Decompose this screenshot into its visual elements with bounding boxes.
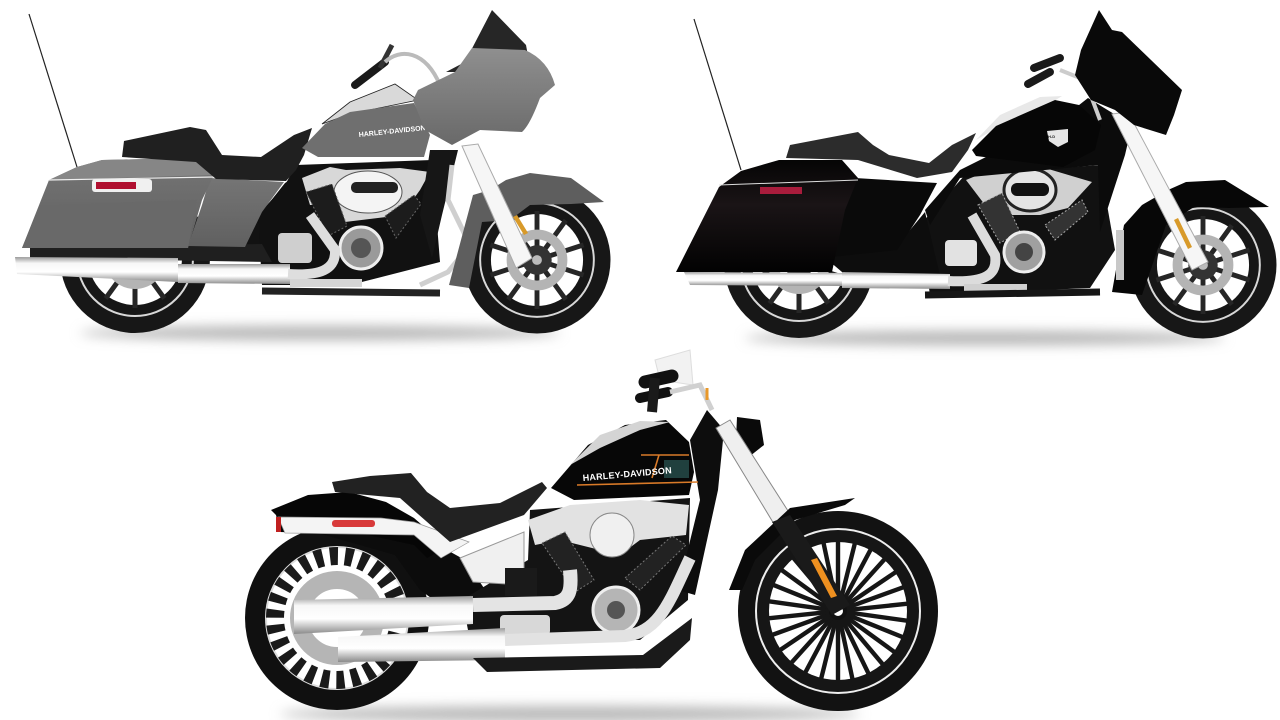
fork [1112, 112, 1208, 270]
rear wheel [724, 188, 874, 338]
lower fork [772, 515, 850, 615]
engine block [460, 498, 690, 640]
tank shield logo: H-D [1048, 134, 1055, 139]
fork reflector [1174, 218, 1192, 249]
exhaust system [15, 215, 440, 293]
exhaust system [294, 558, 690, 662]
rear wheel [245, 526, 429, 710]
fork [462, 144, 532, 268]
panel: black cruiser motorcycle, bottom centre [245, 350, 938, 720]
tank logo: HARLEY-DAVIDSON [582, 465, 672, 483]
side cover [188, 178, 284, 247]
antenna [29, 14, 77, 167]
batwing fairing [1075, 10, 1182, 135]
seat [332, 473, 547, 542]
seat [786, 132, 976, 178]
side cover [822, 178, 937, 258]
saddlebag [676, 160, 858, 272]
handlebar and grips [1028, 58, 1100, 120]
black rear frame and wheel well [300, 528, 492, 615]
fairing [413, 48, 555, 145]
antenna [694, 19, 741, 170]
ground shadow [745, 331, 1225, 345]
panel: grey touring motorcycle, top left [15, 10, 610, 340]
engine block [920, 165, 1115, 295]
fuel tank [972, 100, 1101, 167]
front wheel [1130, 192, 1276, 338]
front fender [449, 173, 604, 288]
tank logo: HARLEY-DAVIDSON [358, 125, 426, 139]
chrome engine guard [420, 165, 470, 285]
handlebar, windshield and mirror assembly [640, 350, 712, 412]
chrome tank console [322, 84, 418, 124]
fuel tank [551, 420, 698, 500]
rear fender [271, 492, 450, 558]
saddlebag [22, 158, 214, 248]
front fender [1112, 180, 1269, 295]
dark lower section under side cover [822, 212, 940, 276]
front wheel [464, 186, 610, 334]
chrome fender strut [276, 517, 469, 558]
rear wheel [60, 183, 210, 333]
dark strip under the bag [30, 244, 272, 262]
handlebar and grips [355, 45, 440, 85]
front wheel [738, 511, 938, 711]
fork reflector [811, 558, 837, 598]
headlight nacelle [736, 417, 764, 460]
ground shadow [280, 706, 860, 720]
windshield [446, 10, 528, 72]
panel: black touring motorcycle, top right [676, 10, 1276, 345]
seat [122, 127, 312, 181]
chrome tank console [976, 96, 1062, 140]
exhaust system [684, 215, 1120, 295]
front fender [729, 498, 855, 590]
frame down tube and neck [678, 410, 724, 595]
ground shadow [80, 326, 560, 340]
upper fork [716, 420, 790, 524]
black frame and neck [925, 98, 1132, 232]
black frame behind fork [420, 150, 458, 258]
engine block [258, 160, 440, 285]
fork reflector [513, 215, 528, 235]
belly pan and footrest [473, 618, 692, 672]
fuel tank [302, 103, 430, 157]
dark frame behind side cover [240, 172, 305, 255]
